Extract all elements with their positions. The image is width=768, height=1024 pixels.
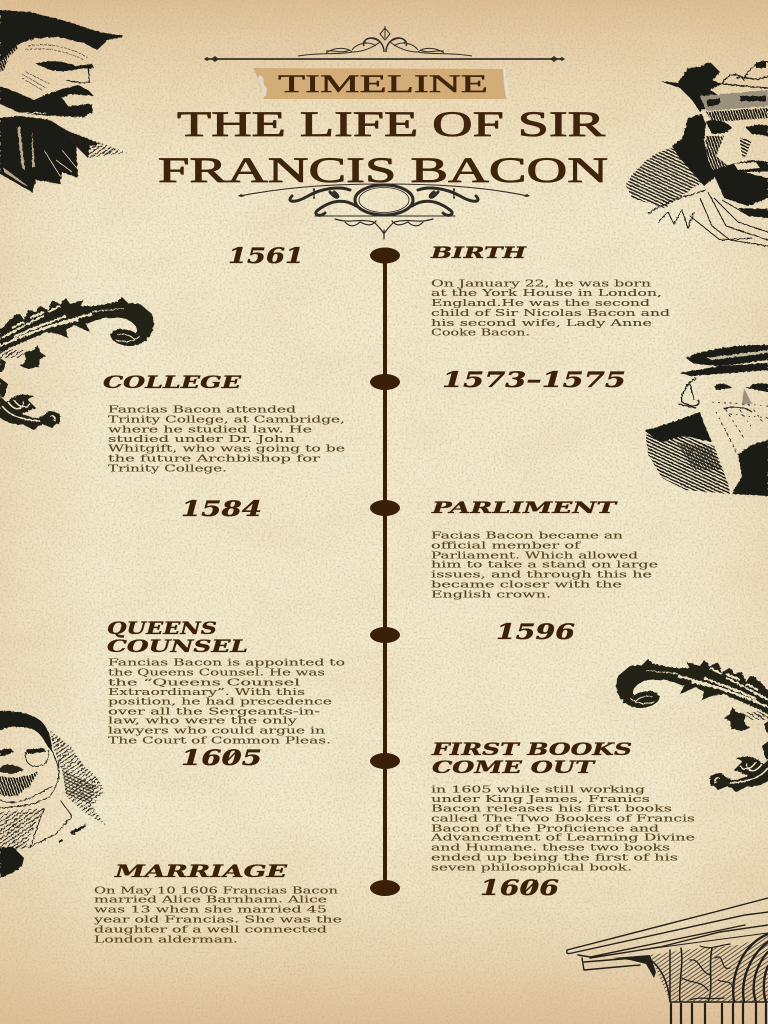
event: college: the future Archbishop for xyxy=(108,454,321,464)
timeline tape label xyxy=(253,68,510,99)
event: first books: Bacon of the Proficience and xyxy=(431,824,659,834)
event: first books: Advancement of Learning Divine xyxy=(429,834,695,844)
event: first books: ended up being the first of his xyxy=(431,854,679,864)
timeline tape label: TIMELINE xyxy=(278,71,488,98)
event: parliament: him to take a stand on large xyxy=(431,560,658,570)
event: college: Fancias Bacon attended xyxy=(108,406,296,416)
event: queens counsel: the “Queens Counsel xyxy=(108,678,300,688)
event: first books: seven philosophical book. xyxy=(431,864,632,874)
event: queens counsel: The Court of Common Pleas. xyxy=(108,736,331,746)
event: marriage: On May 10 1606 Francias Bacon xyxy=(94,886,338,896)
event: parliament: Parliament. Which allowed xyxy=(431,552,638,562)
event: birth: child of Sir Nicolas Bacon and xyxy=(431,309,670,319)
event: birth: On January 22, he was born xyxy=(431,280,651,290)
event: queens counsel: over all the Sergeants-in- xyxy=(108,708,320,718)
event: first books: and Humane. these two books xyxy=(431,844,671,854)
event: birth: at the York House in London, xyxy=(431,289,662,299)
event: birth: England.He was the second xyxy=(431,299,650,309)
event: queens counsel: QUEENS xyxy=(107,619,217,639)
event: marriage: MARRIAGE xyxy=(113,862,289,882)
year 1606: 1606 xyxy=(480,875,560,900)
year 1605: 1605 xyxy=(181,745,262,770)
event: queens counsel xyxy=(107,619,345,746)
event: marriage: married Alice Barnham. Alice xyxy=(94,896,327,906)
event: parliament xyxy=(430,498,658,600)
portrait: man in cap, top left xyxy=(0,10,128,192)
portrait: bearded man, right xyxy=(645,345,768,496)
column capital, bottom right xyxy=(567,898,768,1024)
event: first books: COME OUT xyxy=(432,758,596,778)
event: marriage xyxy=(92,862,342,946)
bottom title ornament xyxy=(238,184,530,239)
title: FRANCIS BACON xyxy=(158,150,608,190)
event: queens counsel: Fancias Bacon is appointed to xyxy=(108,658,345,668)
event: college xyxy=(103,373,345,474)
event: college: COLLEGE xyxy=(103,373,243,393)
year 1561: 1561 xyxy=(228,243,304,268)
event: queens counsel: position, he had precedence xyxy=(108,698,332,708)
portrait: man with ruff, lower left xyxy=(0,711,106,878)
event: birth xyxy=(429,243,670,338)
event: college: Whitgift, who was going to be xyxy=(108,444,345,454)
event: college: where he studied law. He xyxy=(108,426,312,436)
event: parliament: official member of xyxy=(431,542,581,552)
event: first books: Bacon releases his first books xyxy=(431,804,673,814)
event: marriage: year old Francias. She was the xyxy=(92,916,342,926)
event: college: Trinity College. xyxy=(108,464,227,474)
event: first books: FIRST BOOKS xyxy=(431,740,632,760)
event: first books xyxy=(429,740,696,874)
event: queens counsel: law, who were the only xyxy=(108,716,299,726)
event: queens counsel: Extraordinary”. With this xyxy=(108,688,306,698)
year 1573–1575: 1573–1575 xyxy=(442,367,626,392)
title: THE LIFE OF SIR xyxy=(177,104,605,144)
portrait: crowned king, top right xyxy=(626,62,768,246)
event: birth: his second wife, Lady Anne xyxy=(431,319,652,329)
central timeline xyxy=(370,248,400,896)
event: birth: Cooke Bacon. xyxy=(431,328,530,338)
event: first books: in 1605 while still working xyxy=(431,786,645,796)
event: queens counsel: the Queens Counsel. He was xyxy=(108,668,326,678)
event: parliament: became closer with the xyxy=(431,580,622,590)
event: queens counsel: COUNSEL xyxy=(107,637,248,657)
event: marriage: daughter of a well connected xyxy=(94,926,327,936)
year 1584: 1584 xyxy=(181,496,262,521)
event: parliament: Facias Bacon became an xyxy=(431,532,623,542)
event: parliament: issues, and through this he xyxy=(431,570,652,580)
event: marriage: London alderman. xyxy=(94,936,238,946)
event: marriage: was 13 when she married 45 xyxy=(94,906,327,916)
event: parliament: English crown. xyxy=(431,590,551,600)
event: college: Trinity College, at Cambridge, xyxy=(108,416,345,426)
event: first books: called The Two Bookes of Francis xyxy=(431,814,696,824)
scroll ornament, right xyxy=(616,659,768,792)
title xyxy=(158,104,608,190)
event: parliament: PARLIMENT xyxy=(430,498,618,517)
event: birth: BIRTH xyxy=(429,243,527,262)
top ornament xyxy=(204,26,565,62)
event: college: studied under Dr. John xyxy=(108,435,295,445)
event: queens counsel: lawyers who could argue in xyxy=(108,726,325,736)
year 1596: 1596 xyxy=(496,619,576,644)
event: first books: under King James, Franics xyxy=(431,795,651,805)
scroll ornament, left xyxy=(0,297,154,430)
